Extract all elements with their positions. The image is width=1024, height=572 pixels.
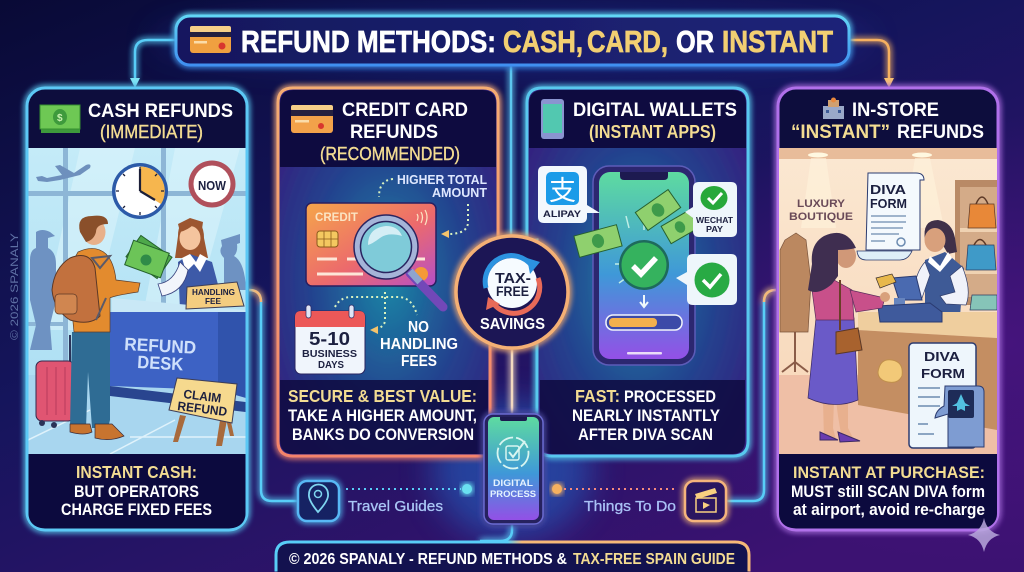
title text: CASH, [503,24,583,59]
badge: tax-free savings: SAVINGS [480,316,545,333]
title text: REFUND METHODS: [241,24,496,59]
sign: handling fee: FEE [205,296,221,306]
heading: in-store instant refunds: “INSTANT” [791,121,890,143]
counter [858,312,997,430]
icon: calendar: 5-10 [309,329,350,349]
sign: handling fee [186,282,244,309]
mannequin with coat [780,233,811,372]
sign: claim refund: CLAIM [183,387,222,406]
credit card illustration [306,203,436,286]
text: cash caption [28,454,246,528]
heading: in-store instant refunds [791,99,984,143]
credit card illustration: CREDIT [315,212,358,224]
teller [158,218,220,310]
icon: store [823,98,844,119]
backpack [52,256,100,322]
icon: credit card [190,26,231,53]
heading: in-store instant refunds: REFUNDS [897,121,984,143]
text: credit card caption: BANKS DO CONVERSION [292,425,474,444]
phone: digital process: DIGITAL [493,478,533,489]
text: in-store caption: at airport, avoid re-charge [793,501,985,519]
text: wallets caption: FAST: [575,386,620,406]
refund desk [110,298,246,412]
heading: digital wallets: (INSTANT APPS) [589,122,716,142]
shelf with handbags [955,180,1000,310]
floating banknotes [574,190,699,257]
title text [241,24,833,59]
text: luxury boutique: LUXURY [797,198,846,210]
watermark: © 2026 SPANALY [9,232,21,340]
icon: check badge [619,240,669,290]
refund desk: DESK [137,352,184,374]
text: wallets caption: NEARLY INSTANTLY [572,406,721,425]
link: travel guides: Travel Guides [348,499,443,515]
icon: magnifying glass [354,215,443,307]
document: diva form scroll [857,173,924,260]
icon: calendar: BUSINESS [302,348,357,360]
arrow: title to cash panel [130,40,176,88]
footer banner: © 2026 SPANALY - REFUND METHODS & [289,551,567,568]
text: luxury boutique: BOUTIQUE [789,211,853,223]
document: diva form scroll: DIVA [870,182,907,197]
footer banner [276,542,749,572]
suitcase [36,335,72,428]
progress bar [606,315,682,330]
connector lines [249,65,776,541]
phone: digital process [484,414,543,524]
dotted connectors [335,292,417,330]
title text: CARD, [587,24,668,59]
heading: credit card: (RECOMMENDED) [320,144,460,164]
traveller [52,216,140,440]
document: diva form with scanner: FORM [921,366,965,381]
heading: digital wallets [573,99,737,142]
heading: digital wallets: DIGITAL WALLETS [573,99,737,121]
document: diva form scroll: FORM [870,196,907,211]
link: travel guides [298,481,472,521]
footer banner: TAX-FREE SPAIN GUIDE [573,551,735,568]
text: in-store caption: INSTANT AT PURCHASE: [793,463,985,482]
heading: credit card [320,99,468,164]
callout: higher total amount: HIGHER TOTAL [397,173,487,187]
phone: digital process: PROCESS [490,489,536,500]
callout: higher total amount: AMOUNT [432,186,487,200]
text: wallets caption: PROCESSED [624,387,716,406]
app bubble: wechat pay: PAY [706,224,723,234]
text: no handling fees: FEES [401,353,437,370]
callout: higher total amount [379,173,487,238]
text: luxury boutique [789,198,853,223]
icon: clapperboard [685,481,726,521]
badge: tax-free savings: TAX- [495,270,531,287]
text: credit card caption [288,386,477,444]
text: in-store caption: MUST still SCAN DIVA form [791,483,985,501]
panel: cash refunds [27,88,247,530]
heading: cash refunds: CASH REFUNDS [88,100,233,122]
text: credit card caption: SECURE & BEST VALUE: [288,386,477,406]
title banner [176,16,849,65]
text: no handling fees [380,319,458,370]
text: in-store caption [779,454,997,528]
icon: plane [36,164,90,182]
link: things to do [552,481,726,521]
silhouette: right officer [220,234,246,290]
icon: clock [112,163,168,219]
badge: now: NOW [198,179,226,193]
heading: credit card: REFUNDS [350,121,438,143]
text: no handling fees: HANDLING [380,336,458,353]
app bubble: alipay: ALIPAY [543,209,582,220]
heading: cash refunds: (IMMEDIATE) [100,121,203,142]
icon: card [291,105,333,133]
badge: now [188,160,236,208]
app bubble: wechat pay [685,182,737,237]
illustration: refund desk [28,148,246,455]
app bubble: wechat pay: WECHAT [696,215,734,225]
app bubble: alipay [538,166,600,223]
icon: calendar: DAYS [318,359,344,371]
heading: in-store instant refunds: IN-STORE [852,99,939,121]
shopper [808,233,896,442]
text: cash caption: CHARGE FIXED FEES [61,500,212,519]
sparkle mark [968,518,1000,552]
panel: credit card refunds [278,88,498,456]
title text: INSTANT [722,24,833,59]
heading: credit card: CREDIT CARD [342,99,468,121]
text: cash caption: INSTANT CASH: [76,462,197,482]
phone with refund confirmation [593,166,695,365]
illustration: boutique [779,148,1000,455]
text: cash caption: BUT OPERATORS [74,482,199,501]
icon: map pin [298,481,339,521]
sign: claim refund [169,378,237,446]
link: things to do: Things To Do [584,499,676,515]
icon: cash stack: $ [57,113,63,124]
refund desk: REFUND [124,334,197,358]
document: diva form with scanner [909,343,984,448]
shop assistant [914,220,968,316]
title text: OR [676,24,714,59]
icon: calendar [295,305,365,374]
app bubble: confirmation [676,254,737,305]
app bubble: alipay: 支 [549,176,576,206]
badge: tax-free savings: FREE [496,284,529,299]
text: wallets caption [572,386,721,444]
sign: claim refund: REFUND [177,399,228,419]
text: no handling fees: NO [408,319,429,336]
icon: cash stack [40,105,80,133]
sign: handling fee: HANDLING [192,287,235,297]
text: wallets caption: AFTER DIVA SCAN [578,425,713,444]
silhouette: left traveller [30,230,56,350]
arrow: title to in-store panel [850,40,894,88]
text: credit card caption: TAKE A HIGHER AMOUNT, [288,406,477,425]
cash register [878,276,942,322]
icon: process check [498,438,528,468]
badge: tax-free savings [456,236,568,348]
panel: in-store refunds [778,88,1000,530]
icon: phone [541,99,564,139]
heading: cash refunds [88,100,233,142]
document: diva form with scanner: DIVA [924,349,961,364]
cash in hand [125,235,172,279]
panel: digital wallets [527,88,748,456]
